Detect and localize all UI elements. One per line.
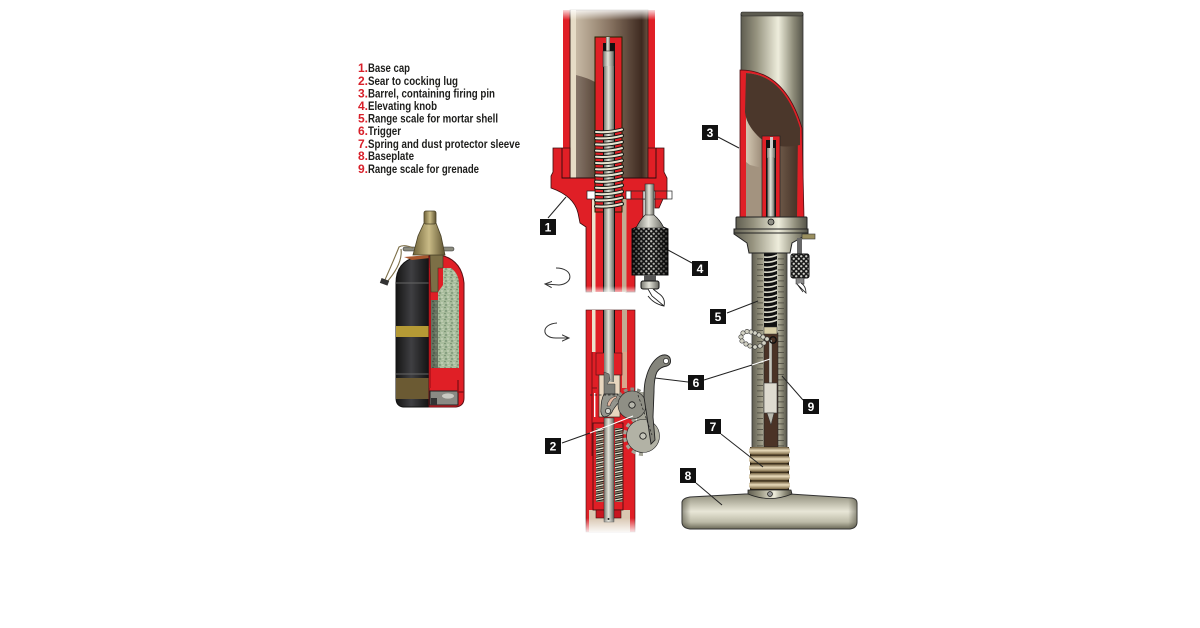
callout 4	[692, 261, 708, 276]
parts legend: Range scale for grenade	[368, 162, 479, 176]
item 8: baseplate	[682, 490, 857, 529]
firing spring	[596, 130, 622, 207]
parts legend: 3.	[358, 86, 368, 100]
firing pin	[603, 37, 614, 292]
fade-outs at barrel ends	[555, 8, 663, 309]
parts legend: 7.	[358, 137, 368, 151]
lower barrel channels	[592, 199, 626, 292]
gear teeth	[617, 390, 646, 454]
parts legend: 5.	[358, 112, 368, 126]
parts legend: 8.	[358, 149, 368, 163]
grenade pull cord	[381, 246, 413, 285]
white locking band	[587, 191, 672, 199]
callout 5: 5	[715, 310, 722, 324]
grenade brass nose	[403, 211, 454, 292]
grenade cutaway illustration	[381, 211, 464, 407]
grenade red cutaway wall	[429, 256, 464, 407]
callout 2: 2	[550, 440, 557, 454]
callout 2	[545, 438, 561, 454]
safety chain	[739, 329, 776, 349]
callout 3: 3	[707, 126, 714, 140]
parts legend: 2.	[358, 74, 368, 88]
parts legend: Trigger	[368, 124, 401, 138]
explosive filling	[431, 268, 459, 368]
grenade base fuze	[430, 380, 464, 405]
parts legend: 4.	[358, 99, 368, 113]
sear block	[596, 310, 622, 417]
item 3: barrel exterior with cutaway	[740, 12, 804, 219]
item 1: base cap	[551, 148, 667, 292]
central sectional view, upper part	[551, 8, 672, 309]
item 2: sear to cocking lug	[590, 394, 622, 417]
central sectional view, lower part	[580, 310, 671, 534]
callout 8: 8	[685, 469, 692, 483]
callout 6	[688, 375, 704, 390]
callout markers	[540, 125, 819, 483]
callout 9: 9	[808, 400, 815, 414]
parts legend: Base cap	[368, 61, 410, 75]
grenade black outer casing	[396, 255, 430, 407]
rotation arrow, upper	[545, 268, 570, 285]
parts legend: 6.	[358, 124, 368, 138]
callout 5	[710, 309, 726, 324]
callout 9	[803, 399, 819, 414]
callout 6: 6	[693, 376, 700, 390]
complete mortar exterior view	[682, 12, 857, 529]
lower barrel tube	[586, 310, 635, 532]
parts legend: Elevating knob	[368, 99, 437, 113]
gear sectors and trigger	[617, 355, 671, 454]
callout 1: 1	[545, 220, 552, 234]
item 7: spring and dust protector sleeve	[749, 447, 790, 491]
bottom fade	[580, 518, 640, 534]
parts legend	[358, 61, 520, 176]
callout 7	[705, 419, 721, 434]
callout 3	[702, 125, 718, 140]
scale tube with ticks	[752, 250, 787, 448]
callout 7: 7	[710, 420, 717, 434]
parts legend: Range scale for mortar shell	[368, 112, 498, 126]
parts legend: 9.	[358, 162, 368, 176]
main spring housing	[593, 418, 623, 522]
parts legend: 1.	[358, 61, 368, 75]
firing pin housing	[595, 37, 622, 292]
parts legend: Barrel, containing firing pin	[368, 86, 495, 100]
elevating knob, exterior	[791, 234, 815, 293]
parts legend: Baseplate	[368, 149, 414, 163]
slot with brown interior	[764, 253, 778, 447]
rotation arrow, lower	[545, 323, 569, 338]
slider and pointer	[764, 340, 777, 425]
item 4: elevating knob	[632, 184, 668, 306]
barrel collar	[734, 217, 808, 253]
callout 4: 4	[697, 262, 704, 276]
barrel section	[563, 10, 655, 178]
parts legend: Sear to cocking lug	[368, 74, 458, 88]
callout 1	[540, 219, 556, 235]
item 6: trigger	[644, 355, 671, 444]
callout 8	[680, 468, 696, 483]
parts legend: Spring and dust protector sleeve	[368, 137, 520, 151]
leader lines	[548, 137, 803, 505]
gear bodies	[636, 392, 655, 452]
